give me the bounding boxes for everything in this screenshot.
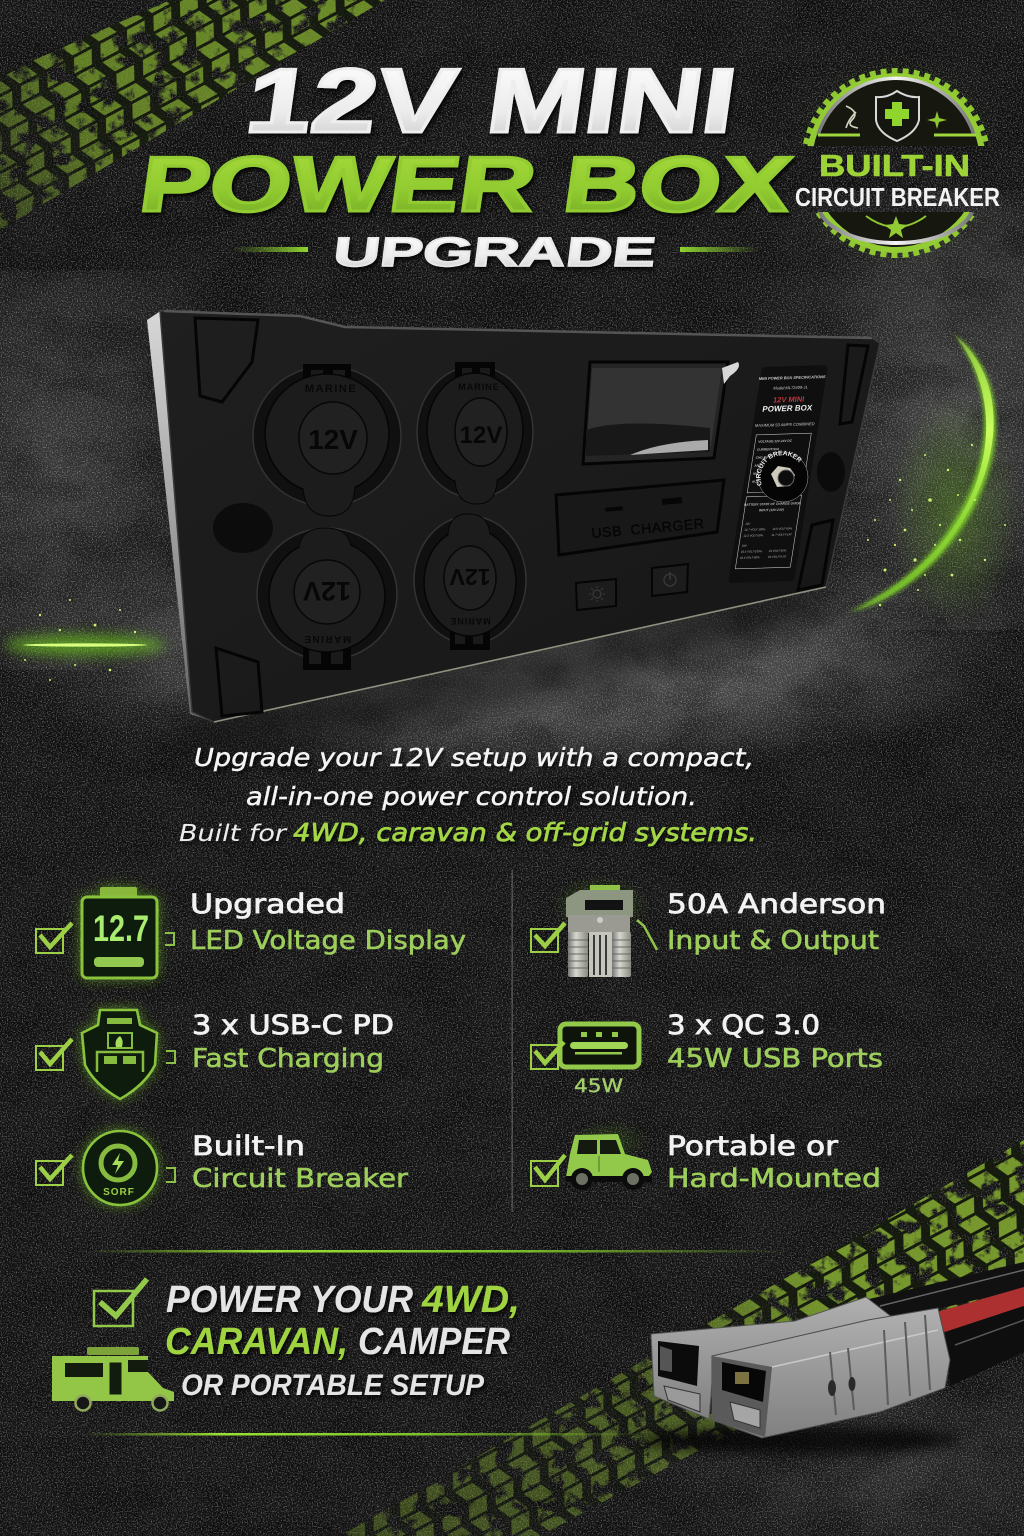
intro line 3: Built for xyxy=(179,821,288,847)
callout text: CAMPER xyxy=(358,1321,511,1363)
column divider xyxy=(512,870,513,1212)
text: Hard-Mounted xyxy=(667,1164,881,1194)
title line: POWER BOX: POWER BOX xyxy=(135,140,797,228)
feature: built-in circuit breaker xyxy=(36,1131,408,1205)
specification label: 11.7 VOLT-FLAT xyxy=(771,532,792,537)
badge icon: star xyxy=(927,111,947,129)
specification label: CHG ROOM xyxy=(755,455,774,460)
corner recesses xyxy=(195,318,868,716)
specification label xyxy=(729,365,828,582)
text: Built-In xyxy=(192,1131,305,1162)
box side edge xyxy=(147,310,215,722)
12V socket: bottom right: MARINE xyxy=(449,616,491,626)
sparkles: right xyxy=(867,444,1006,606)
specification label: MINI POWER BOX SPECIFICATIONS xyxy=(758,374,826,381)
12V socket: top right xyxy=(417,362,533,504)
callout text xyxy=(165,1279,520,1402)
tire tread: bottom right xyxy=(340,1140,1024,1536)
12V socket: top left xyxy=(253,364,401,516)
specification label: MARINE xyxy=(753,471,767,476)
text xyxy=(667,889,886,956)
specification label: ANDERSON xyxy=(754,463,774,468)
tire tread: top left xyxy=(0,0,385,230)
text xyxy=(192,1010,394,1074)
12V socket: top left: 12V xyxy=(308,424,358,455)
12V socket: bottom right: 12V xyxy=(449,564,490,590)
green divider line: top xyxy=(85,1250,790,1252)
intro line 1: Upgrade your 12V setup with a compact, xyxy=(194,743,754,772)
callout text: POWER YOUR xyxy=(166,1279,414,1321)
check xyxy=(531,1042,564,1069)
feature: LED voltage display xyxy=(36,887,466,978)
badge icon: shield with cross xyxy=(876,91,919,141)
12V socket: bottom left: MARINE xyxy=(303,633,351,644)
specification label: 25.4 VOLT-100% xyxy=(741,549,763,554)
round blanking plug: right xyxy=(817,452,845,492)
badge: built-in circuit breaker xyxy=(796,68,1000,258)
intro line 3: 4WD, caravan & off-grid systems. xyxy=(293,818,757,847)
callout text: 4WD, xyxy=(421,1279,520,1321)
check xyxy=(531,923,565,952)
specification label: 12V MINI xyxy=(772,395,805,404)
green streak: right swoosh xyxy=(850,335,1020,625)
badge text: built-in: BUILT-IN xyxy=(819,148,970,183)
specification label: 12.7 VOLT-100% xyxy=(744,527,766,532)
check xyxy=(36,923,72,953)
badge icon: wave mark xyxy=(846,106,858,128)
text xyxy=(667,1131,881,1194)
text xyxy=(667,1010,883,1074)
text: LED Voltage Display xyxy=(190,926,466,956)
intro line 2: all-in-one power control solution. xyxy=(246,782,697,811)
circuit breaker dial: CIRCUIT BREAKER xyxy=(756,450,802,486)
feature: portable or hard-mounted xyxy=(531,1120,881,1194)
button: power xyxy=(652,564,688,596)
upgrade side dashes xyxy=(232,247,760,252)
12V socket: top right: MARINE xyxy=(458,382,500,392)
text: 3 x QC 3.0 xyxy=(667,1010,820,1041)
text xyxy=(192,1131,408,1194)
icon: USB port xyxy=(560,1024,639,1067)
specification label: MAXIMUM 50 AMPS COMBINED xyxy=(755,421,815,428)
button: light xyxy=(576,579,616,610)
plug: right housing xyxy=(712,1308,950,1438)
check xyxy=(36,1155,72,1185)
12V socket: bottom right xyxy=(414,514,526,650)
specification label: AUTO xyxy=(752,479,762,484)
icon: Anderson connector xyxy=(550,875,657,977)
text: Fast Charging xyxy=(192,1044,384,1074)
intro text xyxy=(179,743,757,847)
specification label: INPUT (12V-24V) xyxy=(759,508,784,512)
text: Input & Output xyxy=(667,926,879,956)
icon: shield charger xyxy=(82,1010,157,1099)
specification label: 24V xyxy=(742,544,747,548)
title xyxy=(135,50,797,275)
text xyxy=(190,889,466,956)
check xyxy=(36,1039,72,1070)
connector bracket xyxy=(166,1051,175,1063)
plug: left housing xyxy=(651,1297,893,1419)
title line: 12V MINI: 12V MINI xyxy=(240,50,742,152)
text: 50A Anderson xyxy=(667,889,886,920)
specification label: 12V xyxy=(745,522,751,526)
large check xyxy=(94,1279,147,1326)
connector bracket xyxy=(166,1168,175,1182)
USB charger cover: USB CHARGER xyxy=(591,515,705,541)
product: power box panel xyxy=(147,310,881,761)
green divider line: bottom xyxy=(80,1433,645,1436)
round blanking plug: left xyxy=(213,503,273,553)
icon: battery 12.7 xyxy=(82,887,157,978)
45W label: 45W xyxy=(574,1075,623,1097)
feature: USB-C PD fast charging xyxy=(36,1010,394,1099)
feature: 50A Anderson xyxy=(531,875,886,977)
connector bracket xyxy=(165,933,174,945)
text: 45W USB Ports xyxy=(667,1044,883,1074)
icon: circuit breaker button xyxy=(83,1131,157,1205)
icon: motorhome xyxy=(52,1347,174,1410)
text: Circuit Breaker xyxy=(192,1164,408,1194)
icon: battery 12.7: 12.7 xyxy=(93,908,149,949)
12V socket: top right: 12V xyxy=(460,422,502,449)
icon: circuit breaker button: SORF xyxy=(103,1187,135,1198)
12V socket: top left: MARINE xyxy=(305,383,357,395)
specification label: VOLTAGE:12V-24V DC xyxy=(758,439,793,444)
specification label: 24.4 VOLT-50% xyxy=(740,555,760,560)
feature: QC 3.0 USB ports xyxy=(531,1010,883,1097)
title line: UPGRADE: UPGRADE xyxy=(331,229,659,275)
callout text: OR PORTABLE SETUP xyxy=(181,1369,485,1402)
specification label: Model:ML72409-J1 xyxy=(773,385,809,391)
icon: 4WD vehicle xyxy=(566,1120,652,1190)
specification label: BATTERY STATE OF CHARGE GUIDE xyxy=(744,501,802,507)
specification label: POWER BOX xyxy=(762,403,814,414)
12V socket: bottom left xyxy=(257,528,397,670)
specification label: 12.2 VOLT-50% xyxy=(743,533,764,538)
cables xyxy=(865,1262,1024,1386)
LED screen cut-out xyxy=(583,362,739,464)
text: Portable or xyxy=(667,1131,839,1162)
product: Anderson plug with cables xyxy=(640,1262,1024,1454)
specification label: 23 VOLT-FLAT xyxy=(768,554,787,559)
green flash and sparkles: left xyxy=(5,599,165,681)
box face xyxy=(160,311,880,722)
specification label: CURRENT:50A xyxy=(757,447,780,452)
circuit breaker dial xyxy=(756,450,808,502)
bottom callout xyxy=(52,1279,520,1410)
12V socket: bottom left: 12V xyxy=(303,576,351,606)
specification label: 12.0 VOLT-50% xyxy=(772,526,793,531)
specification label: 24 VOLT-50% xyxy=(769,548,787,553)
text: 3 x USB-C PD xyxy=(192,1010,394,1041)
badge gear ring xyxy=(803,68,990,258)
check xyxy=(531,1155,565,1186)
USB charger cover xyxy=(556,480,724,555)
text: Upgraded xyxy=(190,889,345,920)
callout text: CARAVAN, xyxy=(165,1321,348,1363)
